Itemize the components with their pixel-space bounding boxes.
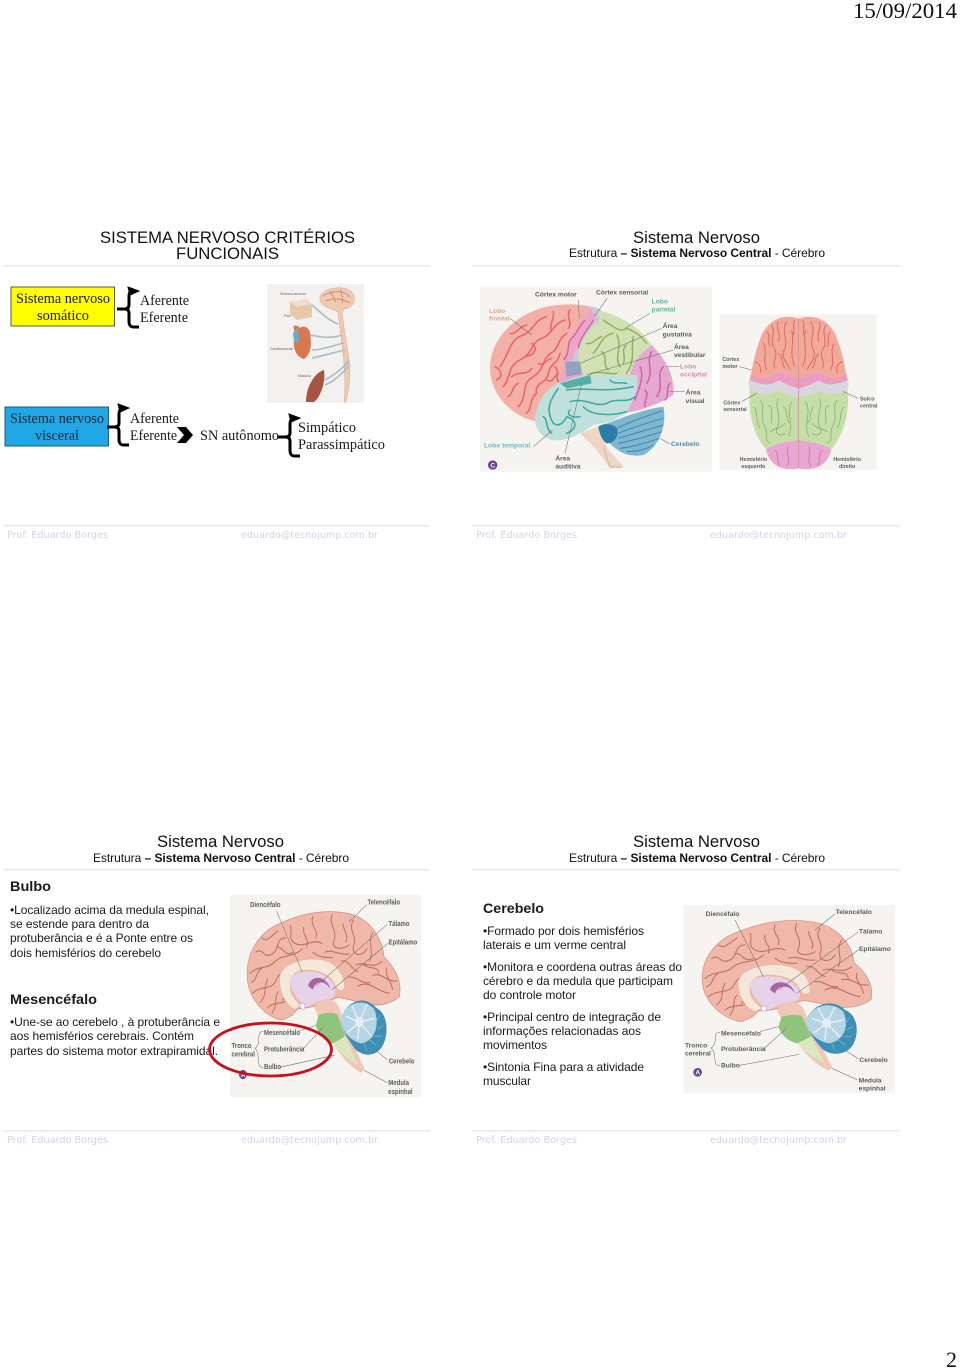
text block: bulbo: protuberância e é a Ponte entre os (10, 931, 193, 945)
illustration: peripheral nerves diagram: Pele (284, 314, 291, 318)
illustration: sagittal brain right: Mesencéfalo (721, 1031, 761, 1038)
illustration: sagittal brain left: Bulbo (264, 1064, 281, 1071)
illustration: sagittal brain right: Telencéfalo (836, 909, 872, 916)
footer: slide 4: eduardo@tecnojump.com.br (710, 1135, 848, 1146)
callout: red ellipse around tronco cerebral (210, 1023, 332, 1076)
illustration: lateral brain lobes: Área (674, 342, 689, 351)
text block: bulbo: dois hemisférios do cerebelo (10, 946, 161, 960)
illustration: peripheral nerves diagram: Músculo (298, 374, 311, 378)
heading: slide 3 title: Estrutura – Sistema Nervoso Central - Cérebro (93, 851, 349, 865)
illustration: lateral brain lobes (480, 287, 712, 472)
panel: slide 4 cerebelo (472, 833, 900, 1146)
illustration: sagittal brain right: Epitálamo (859, 946, 891, 953)
text block: cerebelo: •Sintonia Fina para a atividade (483, 1060, 644, 1074)
text block: mesencefalo: •Une-se ao cerebelo , à protuberância e (10, 1015, 220, 1029)
illustration: sagittal brain left: Telencéfalo (367, 899, 400, 907)
illustration: sagittal brain right: Tálamo (859, 929, 882, 936)
footer: slide 3: eduardo@tecnojump.com.br (241, 1135, 379, 1146)
illustration: peripheral nerves diagram (267, 284, 364, 403)
icon: brace autonomo (278, 414, 300, 456)
text block: cerebelo: do controle motor (483, 988, 576, 1002)
illustration: sagittal brain left: cerebral (232, 1051, 255, 1059)
illustration: sagittal brain left: Cerebelo (389, 1058, 415, 1066)
illustration: lateral brain lobes: Área (686, 388, 701, 397)
heading: slide 4 title: Sistema Nervoso (633, 833, 760, 851)
illustration: lateral brain lobes: Lobo (489, 308, 505, 315)
box: sistema nervoso visceral: visceral (35, 428, 79, 444)
illustration: sagittal brain left (230, 895, 421, 1097)
illustration: sagittal brain left: A (241, 1072, 245, 1079)
footer: slide 4 (476, 1135, 848, 1146)
text block: bulbo: Bulbo (10, 878, 51, 894)
heading: slide 1 title: SISTEMA NERVOSO CRITÉRIOS (100, 228, 355, 247)
illustration: peripheral nerves diagram: Cardiovascular (270, 347, 294, 351)
text: SN autonomo: SN autônomo (200, 428, 279, 444)
illustration: sagittal brain right: Medula (859, 1077, 882, 1084)
illustration: lateral brain lobes: visual (686, 398, 705, 405)
illustration: sagittal brain right: Cerebelo (859, 1057, 888, 1064)
footer: slide 2 (476, 530, 848, 541)
illustration: sagittal brain left: Diencéfalo (250, 901, 281, 909)
text block: cerebelo: laterais e um verme central (483, 938, 626, 952)
illustration: sagittal brain right: A (695, 1070, 700, 1077)
illustration: lateral brain lobes: auditiva (555, 464, 581, 471)
illustration: sagittal brain right: Diencéfalo (706, 911, 739, 918)
illustration: sagittal brain right: espinhal (859, 1085, 886, 1092)
footer: slide 1: eduardo@tecnojump.com.br (241, 530, 379, 541)
text block: mesencefalo: Mesencéfalo (10, 991, 97, 1007)
text block: cerebelo: •Formado por dois hemisférios (483, 924, 644, 938)
illustration: lateral brain lobes: Cerebelo (671, 441, 699, 448)
illustration: lateral brain lobes: occipital (680, 372, 707, 379)
text block: mesencefalo: aos hemisférios cerebrais. Contém (10, 1029, 194, 1043)
illustration: lateral brain lobes: Lobo (652, 299, 668, 306)
text: simpatico parassimpatico (298, 420, 385, 453)
text block: cerebelo: movimentos (483, 1038, 547, 1052)
text: aferente eferente visceral: Eferente (130, 428, 177, 444)
illustration: top view brain: Córtex (722, 357, 739, 363)
arrow: eferente to SN autonomo (177, 427, 193, 443)
text block: mesencefalo: partes do sistema motor extrapiramidal. (10, 1044, 218, 1058)
footer: slide 1: Prof. Eduardo Borges (7, 530, 108, 541)
illustration: lateral brain lobes: Lobo temporal (484, 442, 530, 449)
icon: brace somatico (117, 287, 139, 327)
footer: slide 3: Prof. Eduardo Borges (7, 1135, 108, 1146)
illustration: sagittal brain left: Tálamo (389, 920, 410, 928)
illustration: peripheral nerves diagram: Sistema nervoso (280, 292, 306, 296)
heading: slide 2 title: Sistema Nervoso (633, 229, 760, 247)
text block: cerebelo: muscular (483, 1074, 531, 1088)
panel: slide 3 bulbo and mesencefalo (3, 833, 430, 1146)
illustration: sagittal brain left: espinhal (388, 1088, 413, 1096)
illustration: top view brain: direito (839, 464, 856, 470)
box: sistema nervoso somatico: Sistema nervoso (16, 291, 110, 307)
footer: slide 3 (7, 1135, 379, 1146)
text block: cerebelo: informações relacionadas aos (483, 1024, 641, 1038)
illustration: top view brain: Sulco (860, 396, 875, 402)
illustration: top view brain: Córtex (723, 400, 740, 406)
text block: bulbo (10, 878, 209, 960)
illustration: sagittal brain left: Medula (388, 1080, 409, 1087)
icon: brace visceral (107, 404, 129, 445)
box: sistema nervoso somatico: somático (37, 308, 89, 324)
illustration: top view brain: Hemisfério (740, 457, 768, 463)
illustration: sagittal brain right: Protuberância (721, 1046, 766, 1053)
illustration: sagittal brain right (683, 905, 895, 1093)
box: sistema nervoso visceral: Sistema nervoso (10, 411, 104, 427)
illustration: top view brain: motor (722, 364, 737, 370)
illustration: top view brain: esquerdo (741, 464, 766, 470)
illustration: sagittal brain left: Tronco (232, 1043, 252, 1050)
illustration: top view brain: central (860, 403, 878, 409)
heading: slide 1 title: FUNCIONAIS (176, 244, 279, 263)
illustration: sagittal brain left: Epitálamo (389, 939, 417, 947)
illustration: lateral brain lobes: gustativa (663, 332, 692, 339)
footer: slide 2: Prof. Eduardo Borges (476, 530, 577, 541)
illustration: lateral brain lobes: Área (663, 321, 678, 330)
illustration: lateral brain lobes: Lobo (680, 364, 696, 371)
illustration: lateral brain lobes: frontal (489, 316, 510, 323)
illustration: top view brain: sensorial (723, 407, 747, 413)
text: aferente eferente somatico: Eferente (140, 310, 188, 326)
text: aferente eferente visceral: Aferente (130, 411, 179, 427)
illustration: lateral brain lobes: Área (555, 453, 570, 462)
illustration: sagittal brain right: Tronco (685, 1043, 707, 1050)
text: simpatico parassimpatico: Simpático (298, 420, 356, 436)
panel: slide 2 brain lobes (472, 229, 900, 541)
illustration: sagittal brain left: Protuberância (264, 1046, 305, 1054)
footer: slide 4: Prof. Eduardo Borges (476, 1135, 577, 1146)
illustration: top view brain: Hemisfério (833, 457, 862, 463)
footer: slide 2: eduardo@tecnojump.com.br (710, 530, 848, 541)
text: aferente eferente visceral (130, 411, 179, 444)
footer: slide 1 (7, 530, 379, 541)
heading: slide 1 title (100, 228, 355, 263)
heading: slide 3 title (93, 833, 349, 865)
text block: cerebelo: Cerebelo (483, 900, 544, 916)
box: sistema nervoso somatico (11, 287, 114, 326)
illustration: lateral brain lobes: Córtex motor (535, 292, 577, 299)
illustration: sagittal brain right: cerebral (685, 1051, 711, 1058)
text block: cerebelo: cérebro e da medula que participam (483, 974, 673, 988)
heading: slide 2 title (569, 229, 825, 260)
text: aferente eferente somatico: Aferente (140, 293, 189, 309)
illustration: lateral brain lobes: parietal (652, 307, 675, 314)
heading: slide 4 title (569, 833, 825, 865)
text block: cerebelo: •Principal centro de integração de (483, 1010, 661, 1024)
heading: slide 4 title: Estrutura – Sistema Nervoso Central - Cérebro (569, 851, 825, 865)
illustration: sagittal brain left: Mesencéfalo (264, 1030, 300, 1037)
illustration: lateral brain lobes: vestibular (674, 352, 706, 359)
text block: cerebelo (483, 900, 682, 1088)
text block: bulbo: •Localizado acima da medula espinal, (10, 903, 209, 917)
text: simpatico parassimpatico: Parassimpático (298, 437, 385, 453)
illustration: top view brain (719, 314, 878, 470)
text block: bulbo: se estende para dentro da (10, 917, 149, 931)
text: aferente eferente somatico (140, 293, 189, 326)
text block: cerebelo: •Monitora e coordena outras áreas do (483, 960, 682, 974)
illustration: lateral brain lobes: Córtex sensorial (596, 289, 648, 296)
illustration: lateral brain lobes: C (490, 463, 495, 470)
panel: slide 1 criterios funcionais (3, 228, 430, 541)
illustration: sagittal brain right: Bulbo (721, 1062, 740, 1069)
box: sistema nervoso visceral (5, 407, 108, 446)
text block: mesencefalo (10, 991, 220, 1058)
heading: slide 3 title: Sistema Nervoso (157, 833, 284, 851)
heading: slide 2 title: Estrutura – Sistema Nervoso Central - Cérebro (569, 246, 825, 260)
